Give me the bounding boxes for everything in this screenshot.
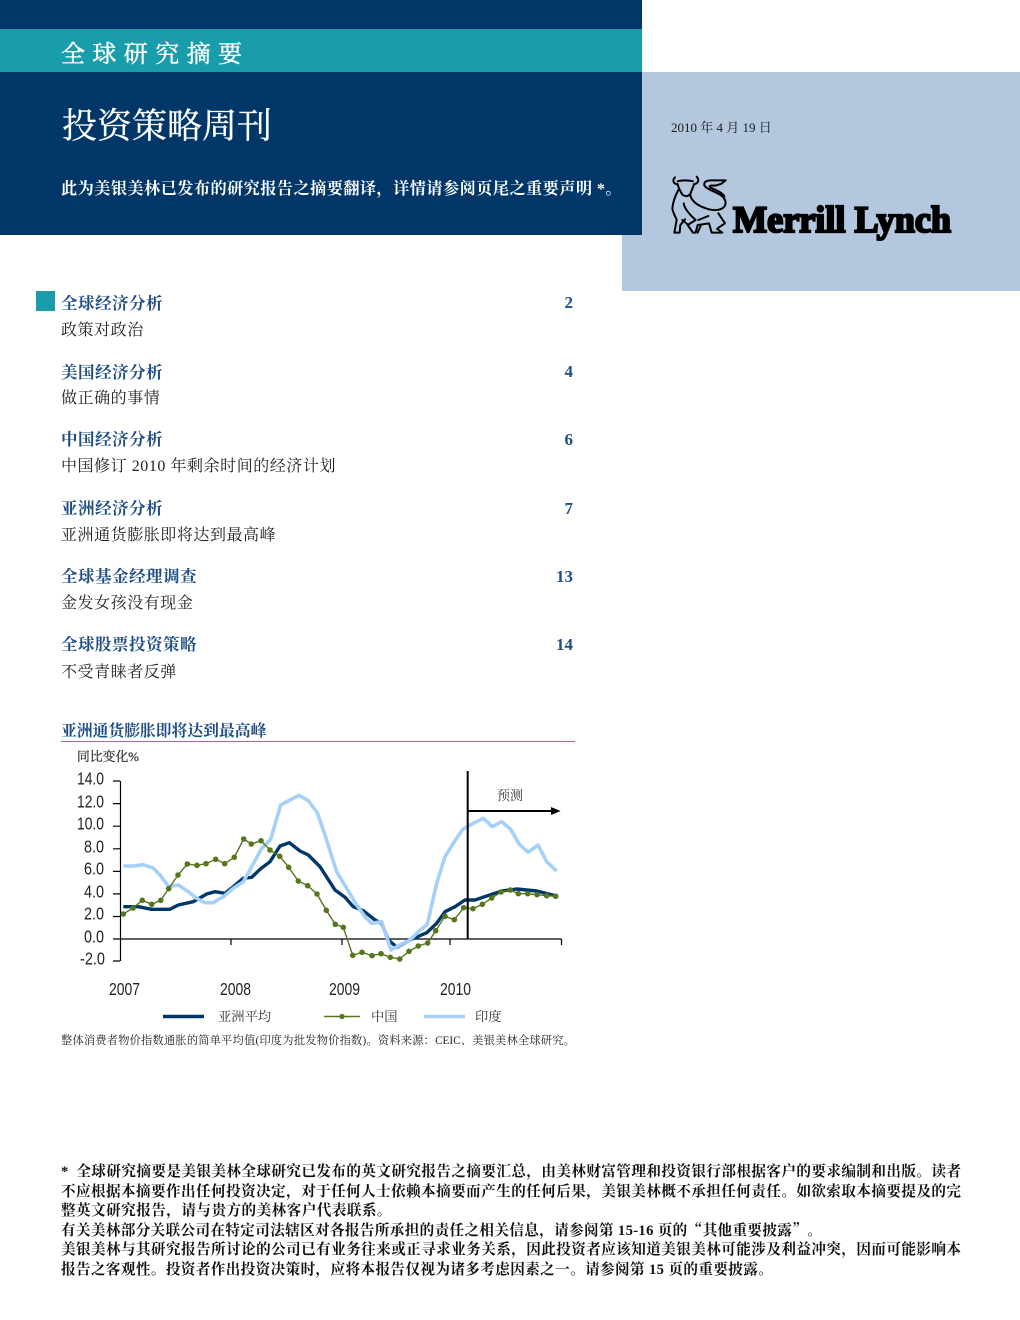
toc subtitle 5: 金发女孩没有现金 — [61, 595, 193, 612]
toc page 4: 7 — [564, 499, 573, 518]
legend: 亚洲平均 — [218, 1009, 271, 1024]
panel: date and logo background — [622, 72, 1020, 291]
y axis labels: 4.0 — [84, 882, 104, 902]
series: China — [120, 836, 558, 962]
forecast label: 预测 — [497, 788, 523, 803]
line chart: inflation — [77, 749, 562, 1024]
disclaimer line 2: 不应根据本摘要作出任何投资决定，对于任何人士依赖本摘要而产生的任何后果，美银美林概不承担任何责任。如欲索取本摘要提及的完 — [61, 1184, 961, 1200]
toc heading 3: 中国经济分析 — [61, 430, 163, 449]
teal band with series name — [0, 29, 642, 72]
arrow: forecast — [468, 808, 558, 814]
panel: table of contents — [36, 291, 573, 681]
toc heading 2: 美国经济分析 — [61, 363, 163, 382]
chart heading — [61, 721, 575, 742]
x axis labels: 2008 — [220, 979, 251, 999]
toc page 5: 13 — [556, 567, 573, 586]
forecast divider — [467, 771, 469, 939]
y axis labels — [77, 768, 105, 968]
toc page 3: 6 — [564, 430, 573, 449]
y axis labels: 0.0 — [84, 926, 104, 946]
series name: 全球研究摘要 — [61, 42, 249, 68]
toc subtitle 4: 亚洲通货膨胀即将达到最高峰 — [61, 527, 276, 544]
chart source note: 整体消费者物价指数通胀的简单平均值(印度为批发物价指数)。资料来源：CEIC、美银美林全球研究。 — [61, 1035, 575, 1047]
y axis labels: 14.0 — [77, 768, 104, 788]
toc heading 6: 全球股票投资策略 — [61, 635, 197, 654]
y axis labels: 12.0 — [77, 792, 104, 812]
toc heading 1: 全球经济分析 — [61, 294, 163, 313]
disclaimer line 4: 有关美林部分关联公司在特定司法辖区对各报告所承担的责任之相关信息，请参阅第 15-16 页的“其他重要披露”。 — [61, 1219, 822, 1240]
disclaimer line 6: 报告之客观性。投资者作出投资决策时，应将本报告仅视为诸多考虑因素之一。请参阅第 15 页的重要披露。 — [61, 1262, 773, 1278]
toc subtitle 6: 不受青睐者反弹 — [61, 664, 177, 681]
x axis labels: 2007 — [109, 979, 140, 999]
footer disclaimer — [61, 1163, 961, 1278]
y-axis unit: 同比变化% — [77, 749, 139, 764]
marker square — [36, 291, 55, 311]
y axis labels: 8.0 — [84, 836, 104, 856]
series: Asia average — [123, 843, 557, 947]
wordmark: Merrill Lynch — [733, 200, 951, 241]
subtitle disclaimer: 此为美银美林已发布的研究报告之摘要翻译，详情请参阅页尾之重要声明 *。 — [61, 180, 622, 198]
toc subtitle 3: 中国修订 2010 年剩余时间的经济计划 — [61, 458, 336, 475]
series: India — [123, 795, 557, 950]
toc page 2: 4 — [564, 362, 573, 381]
disclaimer line 1: * 全球研究摘要是美银美林全球研究已发布的英文研究报告之摘要汇总，由美林财富管理和投资银行部根据客户的要求编制和出版。读者 — [61, 1164, 961, 1180]
legend — [163, 1008, 502, 1024]
toc page 6: 14 — [556, 635, 573, 654]
icon: Merrill Lynch logo — [671, 176, 952, 242]
y axis — [113, 781, 562, 961]
chart heading: 亚洲通货膨胀即将达到最高峰 — [61, 723, 266, 740]
toc subtitle 2: 做正确的事情 — [61, 390, 160, 407]
x axis labels: 2009 — [329, 979, 360, 999]
toc page 1: 2 — [564, 293, 573, 312]
x axis labels: 2010 — [440, 979, 471, 999]
disclaimer line 5: 美银美林与其研究报告所讨论的公司已有业务往来或正寻求业务关系，因此投资者应该知道美银美林可能涉及利益冲突，因而可能影响本 — [61, 1242, 961, 1258]
date: 2010 年 4 月 19 日 — [671, 120, 772, 135]
legend: 印度 — [475, 1008, 502, 1024]
title: 投资策略周刊 — [62, 107, 272, 146]
y axis labels: 2.0 — [84, 904, 104, 924]
y axis labels: 10.0 — [77, 814, 104, 834]
y axis labels: 6.0 — [84, 858, 104, 878]
icon: bull — [672, 177, 726, 233]
panel: header banner — [0, 0, 642, 235]
toc heading 4: 亚洲经济分析 — [61, 499, 163, 518]
legend: 中国 — [371, 1008, 398, 1024]
toc subtitle 1: 政策对政治 — [61, 322, 144, 339]
y axis labels: -2.0 — [80, 948, 105, 968]
toc heading 5: 全球基金经理调查 — [61, 567, 197, 586]
disclaimer line 3: 整英文研究报告，请与贵方的美林客户代表联系。 — [61, 1203, 392, 1219]
x axis labels — [109, 979, 471, 999]
